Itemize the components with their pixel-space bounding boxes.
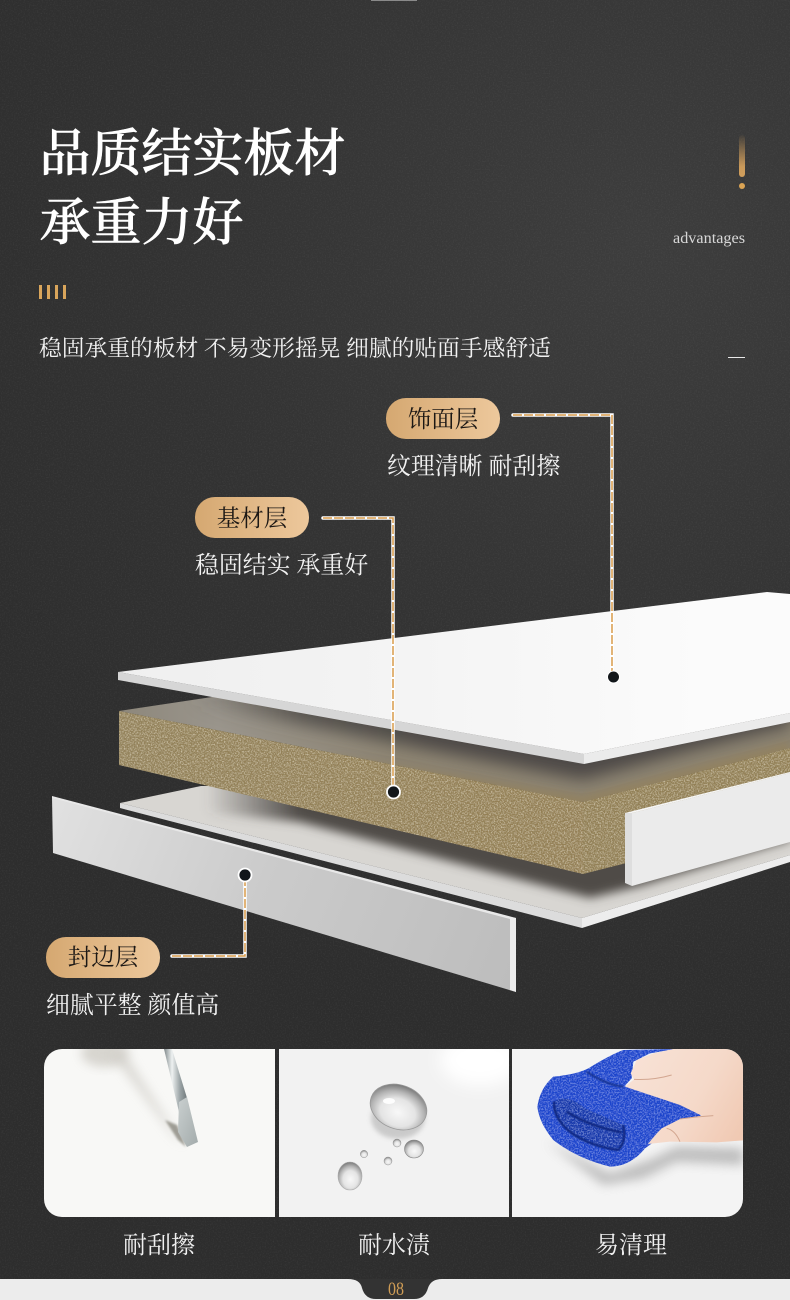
pill: 饰面层: 饰面层 [408,406,479,433]
pill: 基材层 [195,497,309,538]
caption: substrate layer: 稳固结实 承重好 [195,552,368,579]
feature labels [123,1232,667,1259]
callout: decorative layer [386,398,620,683]
board diagram [52,592,790,992]
subtitle: 稳固承重的板材 不易变形摇晃 细腻的贴面手感舒适 [39,336,551,361]
footer strip with page tab [0,1279,790,1300]
caption: decorative layer: 纹理清晰 耐刮擦 [387,453,560,480]
pill: 饰面层 [386,398,500,439]
leader line: substrate layer [323,518,400,798]
page number: 08 [388,1279,404,1300]
icon: four gold bars [39,285,66,299]
callout: substrate layer [195,497,400,798]
icon: gold exclamation mark [739,135,745,189]
photo: water resistant with droplets [279,1049,509,1217]
photo: scratch resistant with screwdriver [44,1039,275,1217]
leader line: edge banding [172,868,252,956]
short white rule [728,357,745,358]
caption: edge banding: 细腻平整 颜值高 [46,992,219,1019]
callout: edge banding [46,868,252,1019]
title: 品质结实板材 [40,127,346,183]
title: 承重力好 [40,196,244,252]
feature labels: 耐刮擦 [123,1232,195,1259]
feature labels: 耐水渍 [358,1232,430,1259]
top decorative board [118,592,790,764]
photo: easy to clean with towel and hand [512,1049,743,1217]
leader line: decorative layer [513,415,620,683]
feature labels: 易清理 [595,1232,667,1259]
english label: advantages [673,230,745,247]
bottom board [120,786,790,928]
title [40,127,346,252]
left edge strip [52,796,516,992]
pill: 封边层: 封边层 [68,944,139,971]
particle board core [119,696,790,874]
pill: 封边层 [46,937,160,978]
right edge strip [625,772,790,886]
pill: 基材层: 基材层 [217,505,288,532]
